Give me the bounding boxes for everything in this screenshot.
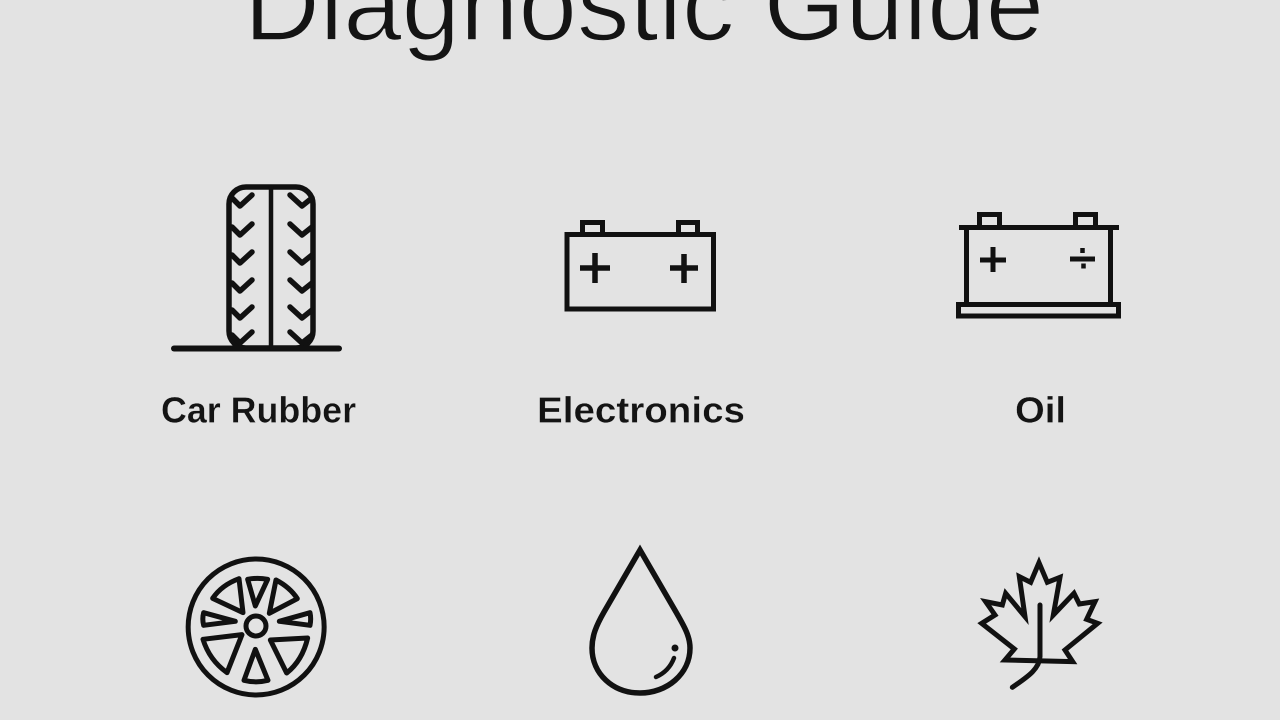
label: electronics: Electronics [537,390,745,430]
icon: wheel [188,559,324,695]
label: oil: Oil [1015,390,1066,430]
icon: maple leaf [982,563,1098,687]
label: car rubber: Car Rubber [161,390,356,430]
icon: tire [174,187,339,348]
icon: battery [567,222,714,309]
icon: battery with base [958,214,1119,316]
icon: water drop [592,550,690,693]
